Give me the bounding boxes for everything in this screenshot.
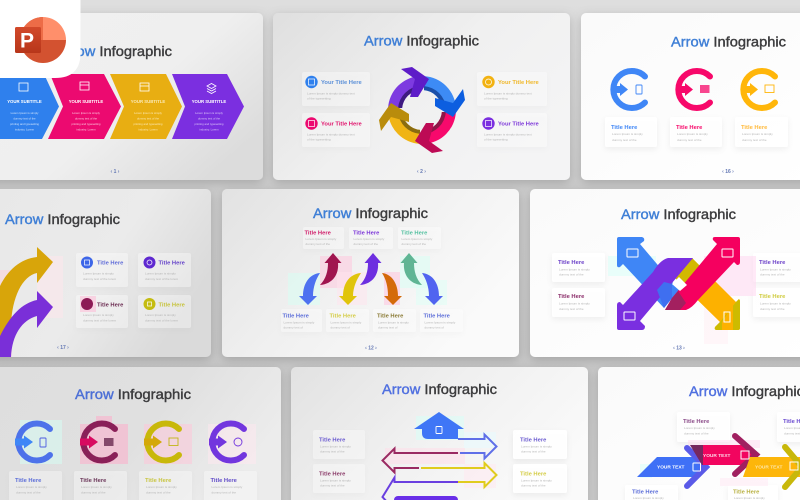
- chevron: yellow: printing and typesetting: [134, 122, 163, 126]
- arrow up: crimson: [320, 253, 342, 285]
- chevron: purple: printing and typesetting: [195, 122, 224, 126]
- curved arrow: yellow: [0, 247, 53, 340]
- card: blue title: [76, 253, 128, 287]
- card: right purple: dummy text of the: [760, 272, 785, 276]
- card: right olive: Lorem Ipsum is simply: [760, 302, 791, 306]
- page number: 17: ‹ 17 ›: [57, 345, 69, 351]
- card: bottom orange: [373, 309, 416, 332]
- arrow down: blue right: [422, 273, 443, 305]
- page number: 13: ‹ 13 ›: [673, 346, 685, 352]
- card: bottom center: [728, 485, 778, 500]
- card: pink: [670, 117, 722, 147]
- card: yellow: dummy text of the: [742, 138, 767, 142]
- card: blue: [605, 117, 657, 147]
- card: right yellow: Lorem Ipsum is simply: [521, 478, 552, 482]
- card: top green: Lorem Ipsum is simply: [402, 237, 433, 241]
- card: blue title: dummy text of the lorem: [83, 277, 117, 281]
- arrow path: snake lines: [382, 434, 496, 500]
- panel: slide arrow circles four: [0, 367, 281, 500]
- panel: slide 16 arrow circles: [581, 13, 800, 180]
- title: slide 13: Arrow Infographic: [621, 206, 736, 222]
- card: top left: Lorem Ipsum is simply: [684, 426, 715, 430]
- card: pink: Lorem Ipsum is simply: [677, 132, 708, 136]
- chevron: blue: Lorem Ipsum is simply: [11, 111, 39, 115]
- icon: purple circular arrow: [209, 424, 244, 461]
- card: yellow title: Lorem Ipsum is simply dummy text: [484, 92, 532, 96]
- icon: house: [414, 412, 464, 439]
- card: yellow title: of the typesetting: [484, 96, 508, 100]
- card: top crimson: [303, 227, 344, 249]
- card: blue: [9, 471, 62, 500]
- panel: slide house arrows: [291, 367, 588, 500]
- card: top purple: Title Here: [353, 230, 380, 236]
- card: top green: [398, 227, 441, 249]
- title: slide 17: Arrow Infographic: [5, 211, 120, 227]
- crossed arrows diagram: [617, 237, 740, 330]
- arrow: pink up-right: [665, 237, 740, 310]
- card: left purple: dummy text of the: [320, 450, 345, 454]
- title: slide 12: Arrow Infographic: [313, 205, 428, 221]
- title: slide 2: Arrow Infographic: [364, 32, 479, 48]
- card: left purple: [552, 253, 605, 282]
- title: slide 8: Arrow Infographic: [382, 381, 497, 397]
- card: olive title: dummy text of the lorem: [145, 318, 179, 322]
- card: yellow title: [477, 72, 547, 106]
- card: blue title: Lorem Ipsum is simply: [83, 272, 114, 276]
- card: bottom left: [625, 485, 678, 500]
- card: bottom orange: dummy text of: [378, 326, 398, 330]
- circular arrow diagram: [379, 67, 465, 153]
- card: maroon title: dummy text of the lorem: [83, 318, 117, 322]
- card: bottom center: Lorem Ipsum is simply: [734, 496, 765, 500]
- card: left maroon: dummy text of the: [559, 307, 584, 311]
- card: right purple: [753, 253, 800, 282]
- card: olive title: [138, 295, 191, 328]
- card: olive title: Lorem Ipsum is simply: [145, 313, 176, 317]
- page number: 2: ‹ 2 ›: [417, 169, 426, 175]
- card: purple: dummy text of the: [212, 490, 236, 494]
- card: left maroon: Lorem Ipsum is simply: [320, 478, 351, 482]
- card: left maroon: Title Here: [558, 294, 585, 300]
- chevron: pink: dummy text of the: [75, 116, 98, 120]
- page number: 1: ‹ 1 ›: [111, 169, 120, 175]
- chevron: purple: industry. Lorem: [199, 128, 219, 132]
- card: blue title: Your Title Here: [321, 80, 362, 86]
- chevron: pink: printing and typesetting: [72, 122, 101, 126]
- chevron: yellow: YOUR SUBTITLE: [131, 99, 165, 104]
- card: right yellow: [513, 464, 567, 493]
- card: maroon: [74, 471, 127, 500]
- card: left maroon: [552, 288, 605, 317]
- arrow: pink: YOUR TEXT: [703, 453, 731, 459]
- arrow: yellow: YOUR TEXT: [755, 464, 783, 470]
- title: slide 1: Arrow Infographic: [57, 43, 172, 59]
- card: bottom yellow: dummy text of: [330, 326, 350, 330]
- arrow up: purple: [360, 253, 382, 285]
- card: bottom blue: dummy text of: [284, 326, 303, 330]
- card: purple title: Lorem Ipsum is simply: [145, 272, 176, 276]
- chevron: yellow: industry. Lorem: [138, 128, 158, 132]
- arrow heads: [379, 67, 465, 153]
- card: right olive: dummy text of the: [760, 307, 785, 311]
- card: bottom left: Title Here: [632, 490, 659, 496]
- card: blue: Lorem Ipsum is simply: [16, 485, 47, 489]
- chevron: pink: Lorem Ipsum is simply: [72, 111, 101, 115]
- card: top left: dummy text of the: [684, 432, 709, 436]
- card: left purple: Title Here: [558, 260, 585, 266]
- curved arrow: purple: [0, 291, 53, 357]
- card: top right: [777, 412, 800, 442]
- arrow down: blue left: [299, 273, 320, 305]
- card: bottom indigo: Lorem Ipsum is simply: [424, 320, 456, 324]
- card: pink title: of the typesetting: [307, 138, 331, 142]
- icon: pink circular arrow: [676, 71, 710, 108]
- card: right purple: [513, 430, 567, 459]
- card: blue title: [302, 72, 370, 106]
- card: left purple: dummy text of the: [559, 272, 584, 276]
- card: top purple: dummy text of the: [354, 242, 378, 246]
- card: blue title: Lorem Ipsum is simply dummy text: [307, 92, 355, 96]
- card: yellow: Title Here: [741, 125, 768, 131]
- card: left purple: Lorem Ipsum is simply: [559, 268, 590, 272]
- card: left maroon: Lorem Ipsum is simply: [559, 302, 590, 306]
- card: bottom indigo: Title Here: [424, 314, 451, 320]
- card: purple: Lorem Ipsum is simply: [212, 485, 243, 489]
- card: pink title: Lorem Ipsum is simply dummy text: [307, 132, 355, 136]
- card: bottom center: Title Here: [733, 490, 760, 496]
- card: top left: Title Here: [683, 419, 710, 425]
- card: purple title: of the typesetting: [484, 138, 508, 142]
- arrow: yellow down-right: [673, 258, 740, 330]
- card: left purple: [313, 430, 365, 459]
- title: slide 9: Arrow Infographic: [689, 383, 800, 399]
- card: right yellow: dummy text of the: [521, 484, 546, 488]
- card: left maroon: Title Here: [319, 472, 346, 478]
- chevron: yellow: dummy text of the: [137, 116, 160, 120]
- panel: slide 1 chevrons: [0, 13, 263, 180]
- panel: slide 12 branching arrows: [222, 189, 519, 357]
- card: blue title: Title Here: [97, 260, 124, 266]
- card: top crimson: dummy text of the: [306, 242, 330, 246]
- card: right yellow: Title Here: [520, 472, 547, 478]
- page number: 12: ‹ 12 ›: [365, 346, 377, 352]
- card: purple title: Title Here: [158, 260, 186, 266]
- arrow: blue: [637, 448, 708, 486]
- arrow: blue up-left: [617, 237, 679, 308]
- card: purple title: dummy text of the lorem: [145, 277, 179, 281]
- icon: blue circular arrow: [15, 424, 50, 461]
- chevron: blue: industry. Lorem: [15, 128, 35, 132]
- purple base block: [394, 496, 458, 500]
- card: purple: Title Here: [210, 478, 238, 484]
- chevron: purple: Lorem Ipsum is simply: [195, 111, 224, 115]
- card: right purple: Title Here: [759, 260, 786, 266]
- card: maroon: Lorem Ipsum is simply: [81, 485, 112, 489]
- card: left maroon: dummy text of the: [320, 484, 345, 488]
- card: right olive: [753, 288, 800, 317]
- card: blue title: of the typesetting: [307, 96, 331, 100]
- arrow up: green: [400, 253, 422, 285]
- icon: blue circular arrow: [611, 71, 645, 108]
- icon: PowerPoint logo: P: [20, 30, 34, 52]
- chevron: blue: printing and typesetting: [10, 122, 39, 126]
- card: top purple: [349, 227, 393, 249]
- arrow down: orange: [382, 273, 402, 305]
- card: blue: dummy text of the: [16, 490, 41, 494]
- chevron: pink: YOUR SUBTITLE: [69, 99, 103, 104]
- chevron: blue: YOUR SUBTITLE: [7, 99, 42, 104]
- chevron: yellow: Lorem Ipsum is simply: [134, 111, 163, 115]
- card: blue: Title Here: [611, 125, 638, 131]
- card: purple: [204, 471, 257, 500]
- card: bottom yellow: Title Here: [330, 314, 357, 320]
- card: left purple: Lorem Ipsum is simply: [320, 444, 351, 448]
- card: bottom blue: [281, 309, 322, 332]
- card: bottom left: Lorem Ipsum is simply: [633, 496, 664, 500]
- card: bottom yellow: [326, 309, 369, 332]
- icon: yellow circular arrow: [741, 71, 775, 108]
- arrow: pink: [690, 436, 756, 474]
- chevron: pink: [48, 74, 121, 139]
- card: right olive: Title Here: [759, 294, 786, 300]
- chevron: blue: [0, 74, 59, 139]
- card: maroon: dummy text of the: [81, 490, 106, 494]
- card: top green: Title Here: [401, 230, 428, 236]
- card: maroon title: [76, 295, 128, 328]
- card: purple title: [138, 253, 191, 287]
- card: top left: [677, 412, 730, 442]
- card: pink title: Your Title Here: [321, 122, 362, 128]
- panel: slide 17 curved arrows: [0, 189, 211, 357]
- title: slide 7: Arrow Infographic: [75, 386, 191, 402]
- icon: olive circular arrow: [144, 424, 179, 461]
- card: olive: Title Here: [145, 478, 172, 484]
- arrow: blue: YOUR TEXT: [657, 464, 685, 470]
- card: top crimson: Title Here: [304, 230, 332, 236]
- card: blue: Lorem Ipsum is simply: [612, 132, 643, 136]
- chevron: blue: dummy text of the: [13, 116, 36, 120]
- card: olive: dummy text of the: [146, 490, 171, 494]
- PowerPoint badge corner: [0, 0, 80, 78]
- panel: slide 2 circular arrows: [273, 13, 570, 180]
- card: blue: Title Here: [15, 478, 42, 484]
- card: bottom blue: Title Here: [282, 314, 310, 320]
- card: yellow: [735, 117, 788, 147]
- card: bottom orange: Lorem Ipsum is simply: [378, 320, 409, 324]
- card: purple title: Lorem Ipsum is simply dummy text: [484, 132, 532, 136]
- panel: slide horizontal arrows: [598, 367, 800, 500]
- card: left purple: Title Here: [319, 438, 346, 444]
- chevron: yellow: [110, 74, 182, 139]
- card: purple title: Your Title Here: [498, 122, 539, 128]
- card: top crimson: Lorem Ipsum is simply: [306, 237, 337, 241]
- ring bodies: [388, 76, 456, 144]
- card: yellow title: Your Title Here: [498, 80, 539, 86]
- arrow: yellow: [743, 447, 800, 487]
- card: pink title: [302, 113, 370, 147]
- card: yellow: Lorem Ipsum is simply: [742, 132, 773, 136]
- chevron: purple: dummy text of the: [198, 116, 221, 120]
- card: left maroon: [313, 464, 365, 493]
- title: slide 16: Arrow Infographic: [671, 34, 786, 50]
- card: bottom indigo: [420, 309, 463, 332]
- chevron: purple: [172, 74, 244, 139]
- card: maroon title: Title Here: [97, 302, 124, 308]
- card: right purple: Lorem Ipsum is simply: [760, 268, 791, 272]
- page number: 16: ‹ 16 ›: [722, 169, 734, 175]
- arrow: purple down-left: [617, 258, 693, 330]
- icon: crimson circular arrow: [80, 424, 115, 461]
- card: right purple: Title Here: [520, 438, 547, 444]
- panel: slide 13 crossed arrows: [530, 189, 800, 357]
- card: right purple: dummy text of the: [521, 450, 546, 454]
- card: blue: dummy text of the: [612, 138, 637, 142]
- chevron: pink: industry. Lorem: [76, 128, 96, 132]
- card: olive: [139, 471, 192, 500]
- card: pink: Title Here: [676, 125, 703, 131]
- card: top purple: Lorem Ipsum is simply: [354, 237, 385, 241]
- card: maroon: Title Here: [80, 478, 107, 484]
- card: purple title: [477, 113, 547, 147]
- card: pink: dummy text of the: [677, 138, 702, 142]
- card: bottom indigo: dummy text of: [424, 326, 444, 330]
- card: bottom blue: Lorem Ipsum is simply: [284, 320, 315, 324]
- card: top green: dummy text of the: [402, 242, 426, 246]
- card: olive title: Title Here: [158, 302, 186, 308]
- card: bottom yellow: Lorem Ipsum is simply: [330, 320, 362, 324]
- card: olive: Lorem Ipsum is simply: [146, 485, 177, 489]
- card: maroon title: Lorem Ipsum is simply: [83, 313, 114, 317]
- chevron: purple: YOUR SUBTITLE: [192, 99, 226, 104]
- card: bottom orange: Title Here: [377, 314, 404, 320]
- arrow down: yellow: [339, 273, 361, 305]
- card: right purple: Lorem Ipsum is simply: [521, 444, 552, 448]
